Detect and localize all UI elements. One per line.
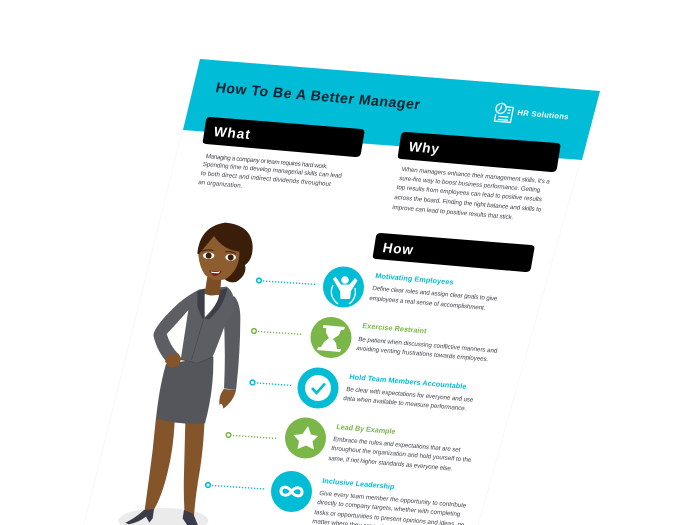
heading: How xyxy=(373,233,534,272)
eyes xyxy=(203,252,214,259)
face xyxy=(198,236,239,280)
neck xyxy=(205,277,221,296)
item: Inclusive Leadership: Inclusive Leadership xyxy=(322,476,396,491)
skirt xyxy=(156,357,213,424)
text: Why body: top results from employees can lead to positive results xyxy=(396,184,542,203)
icon: star xyxy=(294,426,318,450)
header band xyxy=(183,59,600,160)
text: What body: an organization. xyxy=(198,179,243,190)
brand name: HR Solutions xyxy=(517,108,569,121)
item: Hold Team Members Accountable: data when available to measure performance. xyxy=(343,395,467,412)
item: Motivating Employees: Motivating Employees xyxy=(375,271,454,287)
jacket xyxy=(153,287,234,365)
item: Motivating Employees xyxy=(257,266,498,312)
heading: Why xyxy=(398,132,560,172)
title: How To Be A Better Manager xyxy=(214,80,422,113)
jacket seam xyxy=(181,320,213,363)
shadow xyxy=(118,508,208,525)
item: Lead By Example: throughout the organization and hold yourself to the xyxy=(331,445,472,464)
item: Exercise Restraint xyxy=(252,317,498,363)
icon: cheering person xyxy=(331,276,358,304)
icon: hourglass xyxy=(317,325,345,352)
text: What body xyxy=(198,153,343,190)
icon: HR Solutions calendar and clock xyxy=(493,103,514,122)
item: Inclusive Leadership: directly to company targets, whether with completing xyxy=(317,499,461,518)
arm xyxy=(223,296,240,390)
item: Hold Team Members Accountable: Hold Team Members Accountable xyxy=(349,372,467,391)
item: Exercise Restraint: Be patient when discussing conflictive manners and xyxy=(358,336,498,355)
text: Why body: improve can lead to positive results that stick. xyxy=(392,204,514,221)
item: Exercise Restraint: avoiding venting frustrations towards employees. xyxy=(356,345,489,363)
page sheet xyxy=(80,59,600,525)
icon: check mark xyxy=(305,375,331,401)
item: Lead By Example: Lead By Example xyxy=(336,422,396,436)
lapels xyxy=(197,288,205,319)
character: businesswoman xyxy=(118,223,253,525)
mouth xyxy=(209,270,222,276)
item: Lead By Example xyxy=(226,418,472,473)
text: Why body: When managers enhance their management skills, it's a xyxy=(401,166,551,186)
text: What body: Managing a company or team requires hard work. xyxy=(205,153,329,170)
heading: How: How xyxy=(381,240,415,258)
item: Lead By Example: same, if not higher standards as everyone else. xyxy=(328,455,453,473)
heading: Why: Why xyxy=(407,139,441,157)
heading: What xyxy=(203,117,364,157)
item: Hold Team Members Accountable: Be clear with expectations for everyone and use xyxy=(346,386,474,404)
hair back xyxy=(197,223,253,282)
shoes xyxy=(125,509,154,524)
heading: What: What xyxy=(212,124,252,142)
text: Why body: sure-fire way to boost business performance. Getting xyxy=(399,175,541,194)
text: What body: Spending time to develop managerial skills can lead xyxy=(202,161,343,180)
text: Why body xyxy=(392,166,551,221)
item: Motivating Employees: Define clear roles and assign clear goals to give xyxy=(372,285,498,303)
item: Motivating Employees: employees a real sense of accomplishment. xyxy=(369,295,486,312)
item: Exercise Restraint: Exercise Restraint xyxy=(362,321,428,335)
icon: infinity xyxy=(281,487,302,496)
item: Hold Team Members Accountable xyxy=(250,368,474,412)
hand: on hip xyxy=(165,353,181,368)
shirt xyxy=(204,294,220,317)
text: Why body: across the board. Finding the right balance and skills to xyxy=(394,194,542,214)
item: Lead By Example: Embrace the rules and expectations that are set xyxy=(333,436,461,454)
eyebrows xyxy=(202,250,236,254)
hand: hanging xyxy=(219,389,236,409)
text: What body: to both direct and indirect dividends throughout xyxy=(200,170,332,188)
legs xyxy=(145,417,175,511)
item: Inclusive Leadership: Give every team member the opportunity to contribute xyxy=(319,490,467,510)
item: Inclusive Leadership xyxy=(206,471,467,525)
